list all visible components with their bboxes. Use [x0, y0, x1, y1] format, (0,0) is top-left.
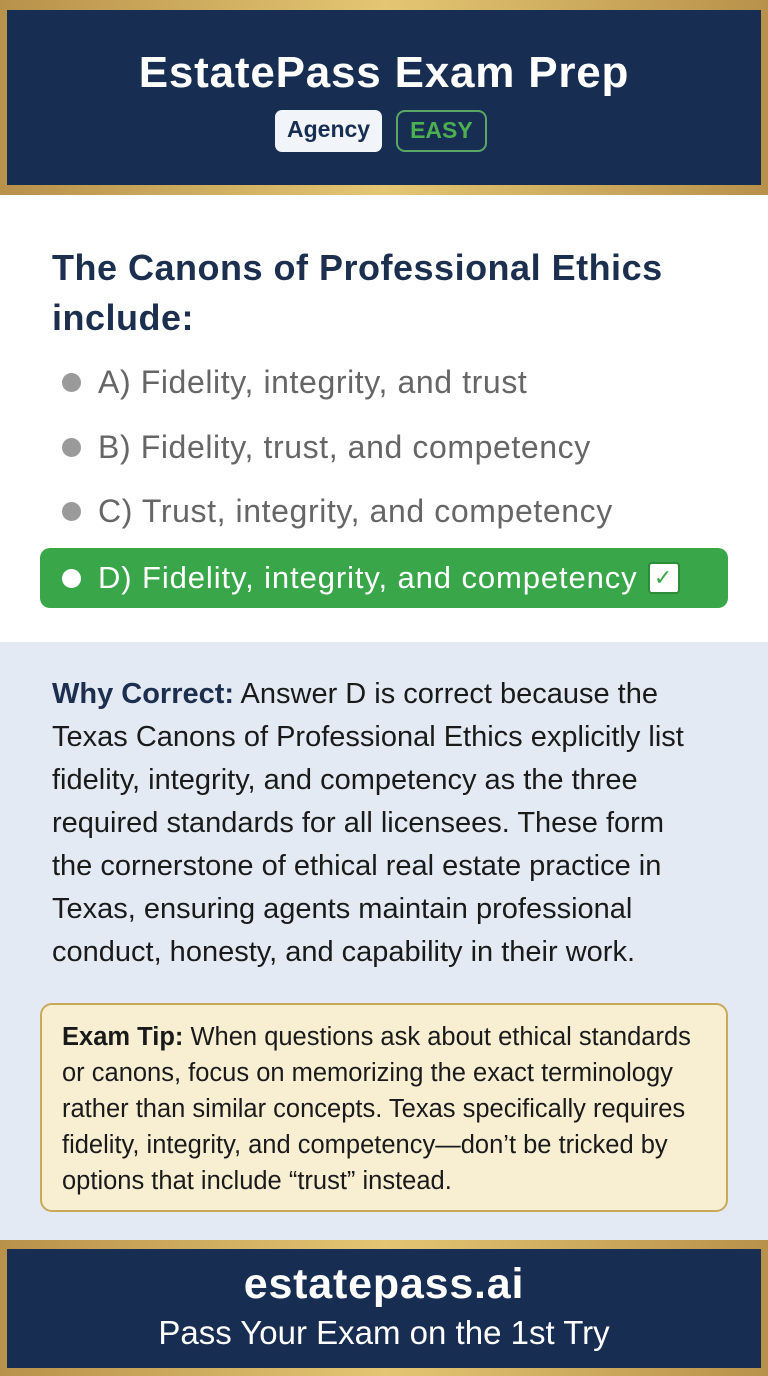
explanation: the cornerstone of ethical real estate practice in	[52, 850, 661, 882]
explanation: Texas Canons of Professional Ethics explicitly list	[52, 721, 684, 753]
header	[0, 0, 768, 195]
footer	[0, 1240, 768, 1376]
explanation	[52, 678, 684, 968]
exam tip: Exam Tip: When questions ask about ethical standards or canons, focus on memorizing the exact terminology rather than similar concepts. Texas specifically requires fidelity, integrity, and competency—don’t be tricked by options that include “trust” instead.	[62, 1023, 691, 1195]
option C: C) Trust, integrity, and competency	[98, 493, 613, 529]
explanation: Texas, ensuring agents maintain professional	[52, 893, 632, 925]
badge: EASY: EASY	[410, 117, 473, 143]
explanation: required standards for all licensees. These form	[52, 807, 664, 839]
explanation: conduct, honesty, and capability in their work.	[52, 936, 635, 968]
badge: EASY	[396, 110, 487, 152]
question panel	[0, 195, 768, 642]
explanation: Why Correct: Answer D is correct because the	[52, 678, 658, 710]
question: The Canons of Professional Ethics include:	[52, 247, 663, 338]
option D correct: ✓	[654, 565, 673, 590]
option A: A) Fidelity, integrity, and trust	[98, 364, 527, 400]
badge: Agency	[275, 110, 382, 152]
badges	[275, 110, 487, 152]
option D correct: D) Fidelity, integrity, and competency	[98, 560, 638, 595]
option D correct	[40, 548, 728, 608]
option B: B) Fidelity, trust, and competency	[98, 429, 591, 465]
title: EstatePass Exam Prep	[139, 48, 629, 97]
explanation: fidelity, integrity, and competency as the three	[52, 764, 638, 796]
badge: Agency: Agency	[287, 116, 370, 142]
footer url: estatepass.ai	[244, 1260, 524, 1308]
tagline: Pass Your Exam on the 1st Try	[158, 1314, 610, 1351]
